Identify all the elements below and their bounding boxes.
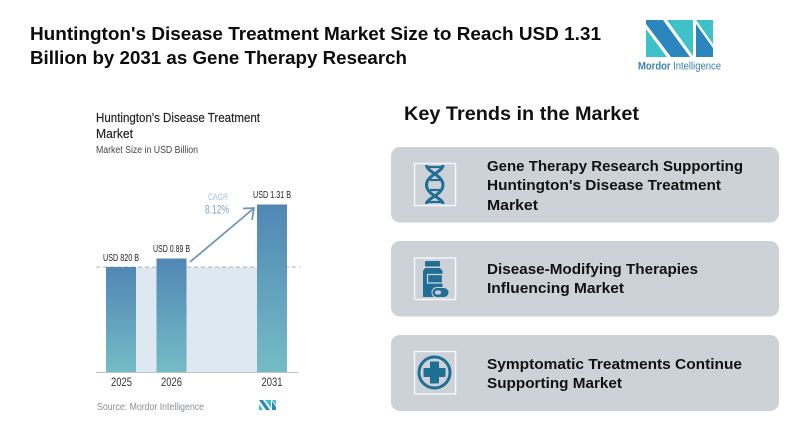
panel text <box>487 262 698 297</box>
panel text: Market <box>487 198 538 214</box>
bar value labels: USD 1.31 B <box>253 190 291 201</box>
title: Billion by 2031 as Gene Therapy Research <box>30 47 407 68</box>
panel: symptomatic treatments <box>391 335 779 411</box>
panel text: Symptomatic Treatments Continue <box>487 357 742 373</box>
bar value labels: USD 820 B <box>103 253 139 264</box>
logo: Mordor Intelligence: Mordor Intelligence <box>638 60 721 72</box>
bar value labels <box>103 190 291 264</box>
CAGR arrow <box>190 208 254 262</box>
bar 2031 <box>257 204 287 372</box>
bar value labels: USD 0.89 B <box>153 244 190 255</box>
icon: DNA helix <box>414 164 456 206</box>
panel text: Supporting Market <box>487 376 622 392</box>
small logo <box>259 400 276 410</box>
axis line <box>96 372 298 374</box>
panel text: Disease-Modifying Therapies <box>487 262 698 278</box>
chart title <box>96 111 260 141</box>
CAGR label <box>205 192 229 216</box>
panel text: Gene Therapy Research Supporting <box>487 159 743 175</box>
shaded area between bars <box>136 267 257 372</box>
panel text <box>487 357 742 392</box>
heading: key trends: Key Trends in the Market <box>404 104 640 125</box>
chart title: Huntington's Disease Treatment <box>96 111 260 125</box>
title: Huntington's Disease Treatment Market Size to Reach USD 1.31 <box>30 23 601 44</box>
source note: Source: Mordor Intelligence <box>97 402 204 413</box>
year labels: 2031 <box>262 377 282 389</box>
year labels: 2026 <box>161 377 182 389</box>
icon: medical cross <box>414 352 456 394</box>
CAGR label: 8.12% <box>205 202 229 216</box>
reference dashed line <box>96 266 300 268</box>
bar 2025 <box>106 267 136 372</box>
chart subtitle: Market Size in USD Billion <box>96 144 198 156</box>
panel text: Influencing Market <box>487 281 624 297</box>
panel: gene therapy <box>391 147 779 222</box>
chart panel: market size <box>96 111 300 413</box>
logo: Mordor Intelligence <box>638 20 721 72</box>
panel text <box>487 159 743 214</box>
bar 2026 <box>156 258 186 372</box>
CAGR label: CAGR <box>208 192 228 202</box>
panel text: Huntington's Disease Treatment <box>487 178 721 194</box>
year labels <box>111 377 282 389</box>
title <box>30 23 601 68</box>
chart title: Market <box>96 127 134 141</box>
icon: medicine bottle <box>414 258 456 300</box>
panel: disease-modifying therapies <box>391 241 779 316</box>
year labels: 2025 <box>111 377 132 389</box>
